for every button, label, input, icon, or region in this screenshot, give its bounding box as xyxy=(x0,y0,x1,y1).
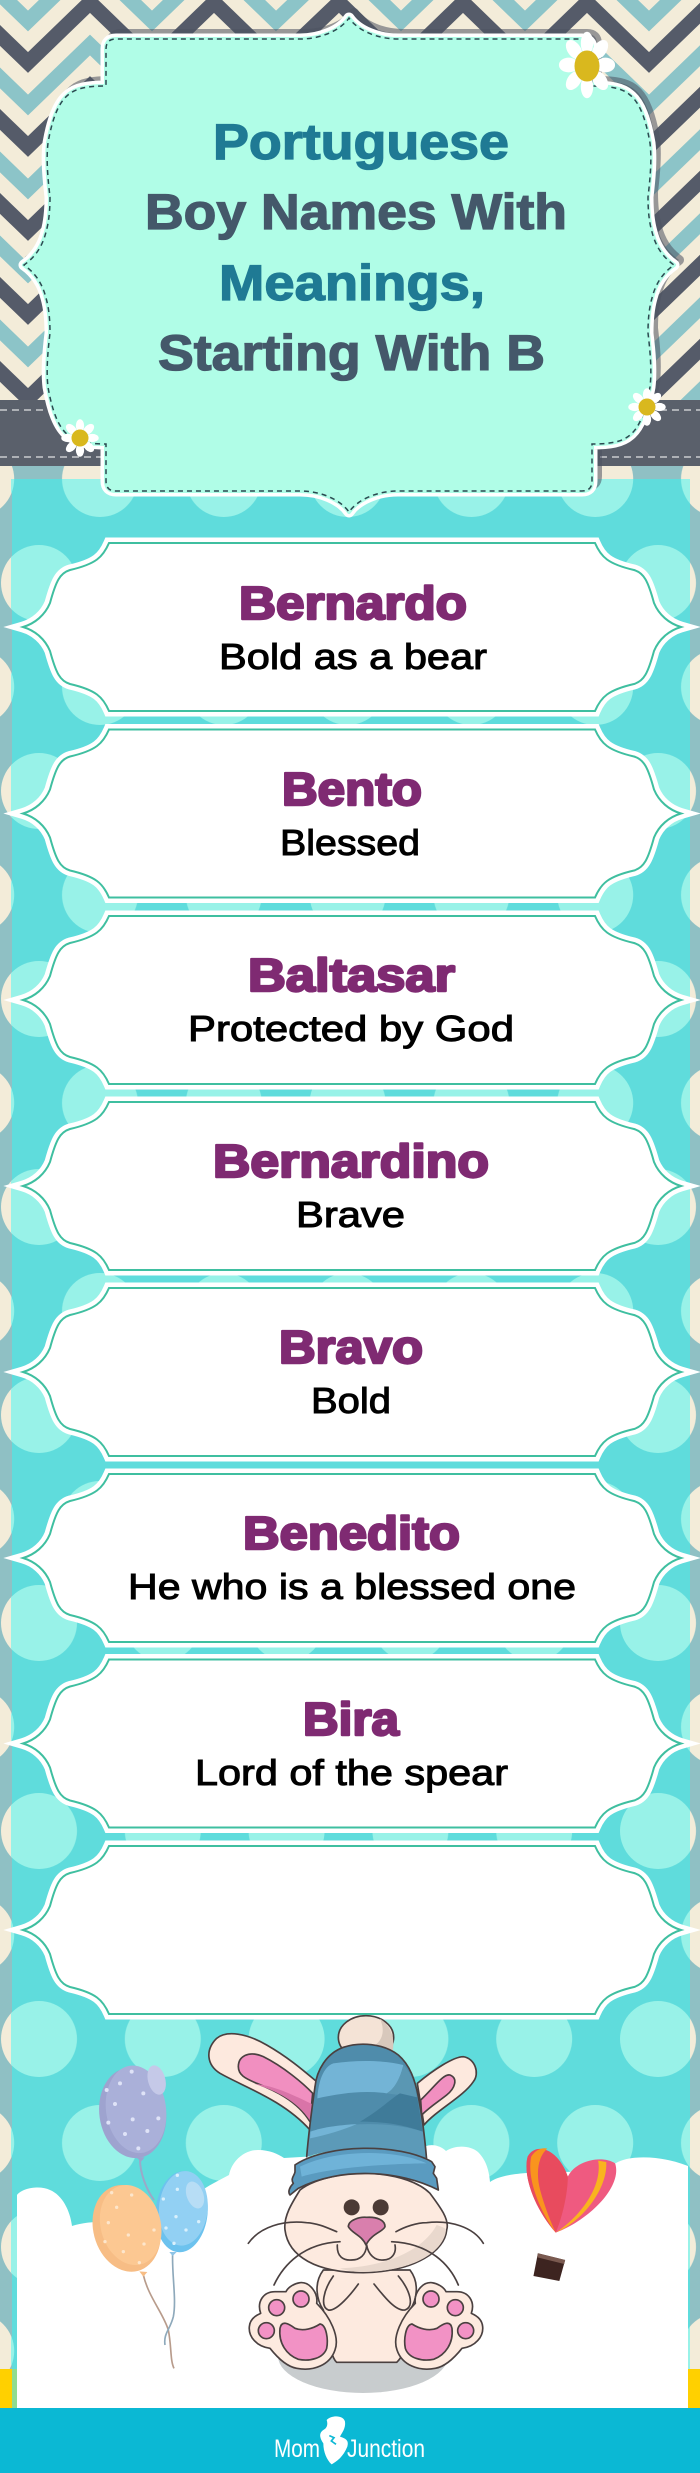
head shading xyxy=(340,2225,446,2272)
ears, pom pom and hat dome xyxy=(209,2016,476,2160)
eyes xyxy=(344,2199,389,2215)
purple balloon string xyxy=(140,2159,154,2200)
body, head and feet xyxy=(248,2173,483,2369)
heart left side xyxy=(526,2149,568,2233)
name: Bravo xyxy=(279,1321,423,1373)
name: Bira xyxy=(303,1693,399,1745)
logo figure xyxy=(320,2416,348,2464)
clouds xyxy=(17,2145,688,2408)
card: empty xyxy=(23,1846,681,2014)
logo text Mom: Mom xyxy=(274,2435,320,2463)
title line 2: Boy Names With xyxy=(145,184,567,240)
background: chevron pattern xyxy=(0,0,700,441)
yellow corner strips xyxy=(0,2369,700,2408)
card: Bento xyxy=(23,730,681,898)
blue balloon string xyxy=(165,2253,174,2345)
heart left stripe xyxy=(530,2148,556,2233)
title line 3: Meanings, xyxy=(219,255,485,311)
background: teal polka dot panel xyxy=(11,479,690,2473)
meaning: Brave xyxy=(296,1194,405,1235)
left foot xyxy=(249,2283,336,2369)
meaning: Bold as a bear xyxy=(219,636,487,677)
whiskers xyxy=(248,2222,483,2285)
title xyxy=(145,114,567,381)
card: Bira xyxy=(23,1660,681,1828)
illustration: bunny xyxy=(209,2016,483,2393)
title line 1: Portuguese xyxy=(213,114,509,170)
name: Bernardino xyxy=(213,1135,489,1187)
arms xyxy=(324,2276,410,2310)
title line 4: Starting With B xyxy=(158,325,545,381)
illustration: balloons xyxy=(83,2062,211,2368)
card: Benedito xyxy=(23,1474,681,1642)
logo: MomJunction xyxy=(274,2416,425,2464)
hat dome xyxy=(307,2044,427,2160)
name: Bernardo xyxy=(239,577,467,629)
blue balloon xyxy=(152,2169,211,2256)
right ear xyxy=(417,2057,476,2125)
panel: title plaque xyxy=(24,13,679,512)
basket xyxy=(533,2253,565,2281)
card: Baltasar xyxy=(23,916,681,1084)
purple balloon xyxy=(93,2062,172,2163)
orange balloon xyxy=(83,2177,170,2279)
hat brim xyxy=(289,2148,438,2195)
meaning: Protected by God xyxy=(188,1008,514,1049)
name: Benedito xyxy=(243,1507,460,1559)
body xyxy=(317,2270,416,2362)
name: Bento xyxy=(282,763,422,815)
icon: daisy bottom left xyxy=(61,419,99,457)
card: Bravo xyxy=(23,1288,681,1456)
icon: daisy top right xyxy=(559,32,615,98)
left ear xyxy=(209,2034,317,2130)
ground shadow xyxy=(278,2319,448,2393)
illustration: heart balloon xyxy=(526,2148,616,2281)
heart right stripe xyxy=(556,2161,606,2233)
meaning: Blessed xyxy=(280,822,420,863)
background: dark stitched band xyxy=(0,400,700,466)
meaning: He who is a blessed one xyxy=(128,1566,576,1607)
heart xyxy=(526,2149,616,2233)
meaning: Lord of the spear xyxy=(195,1752,508,1793)
footer bar xyxy=(0,2408,700,2473)
card: Bernardino xyxy=(23,1102,681,1270)
right foot xyxy=(396,2283,483,2369)
pom pom xyxy=(338,2016,394,2059)
orange balloon string xyxy=(143,2275,174,2368)
head xyxy=(285,2173,447,2273)
basket top xyxy=(537,2253,565,2264)
name: Baltasar xyxy=(248,949,455,1001)
card: Bernardo xyxy=(23,543,681,711)
logo text Junction: Junction xyxy=(347,2435,425,2463)
meaning: Bold xyxy=(311,1380,391,1421)
nose xyxy=(348,2217,385,2245)
icon: daisy bottom right xyxy=(628,388,666,426)
mouth xyxy=(337,2245,395,2260)
